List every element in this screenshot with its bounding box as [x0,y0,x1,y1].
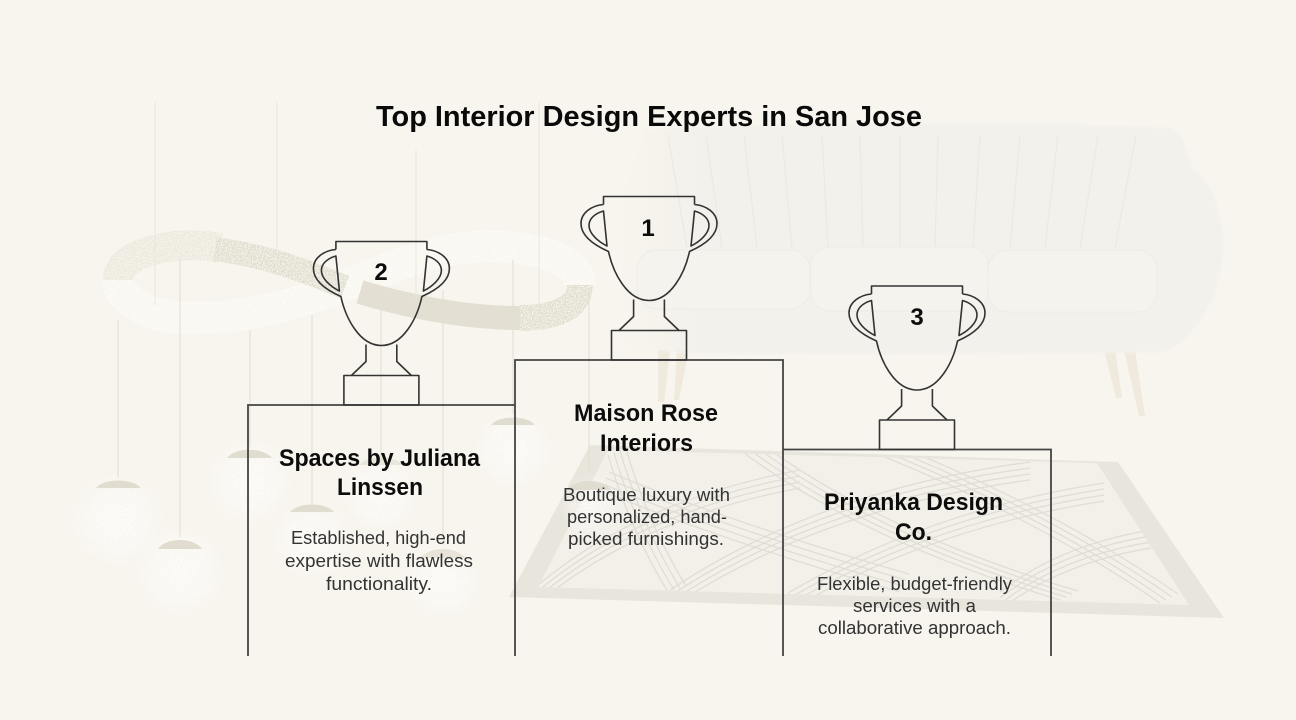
name: Maison Rose Interiors: Maison Rose [574,400,718,427]
title: Top Interior Design Experts in San Jose [376,101,922,133]
illustration: hanging lamps [70,102,619,620]
trophy 3: 3 [910,304,924,331]
name: Priyanka Design Co.: Co. [895,519,932,546]
podium 3: Priyanka Design Co. [783,286,1051,656]
name: Priyanka Design Co.: Priyanka Design [824,489,1003,516]
description 3: services with a [853,596,977,616]
name: Spaces by Juliana Linssen: Spaces by Juliana [279,445,481,472]
illustration: sofa [611,124,1223,416]
description 1: picked furnishings. [568,529,724,549]
podium 1: Maison Rose Interiors [515,196,783,656]
sofa legs [658,350,1145,416]
podium 2: Spaces by Juliana Linssen [248,242,515,656]
description 1: personalized, hand- [567,507,727,527]
description 1: Boutique luxury with [563,485,730,505]
trophy 2 [313,242,449,405]
illustration: infinity pendant ring [118,245,580,318]
trophy 3 [849,286,985,450]
sofa body [611,124,1223,354]
trophy 2: 2 [374,259,388,286]
trophy 1: 1 [641,215,655,242]
sofa cushions [637,247,1157,312]
description 2: Established, high-end [291,528,466,548]
trophy 1 [581,196,717,360]
name: Spaces by Juliana Linssen: Linssen [337,474,423,501]
description 3: Flexible, budget-friendly [817,574,1012,594]
description 2: functionality. [326,574,432,594]
sofa ribs [668,135,1136,248]
description 3: collaborative approach. [818,618,1011,638]
description 2: expertise with flawless [285,551,473,571]
name: Maison Rose Interiors: Interiors [600,430,693,457]
illustration: rug [509,441,1224,618]
